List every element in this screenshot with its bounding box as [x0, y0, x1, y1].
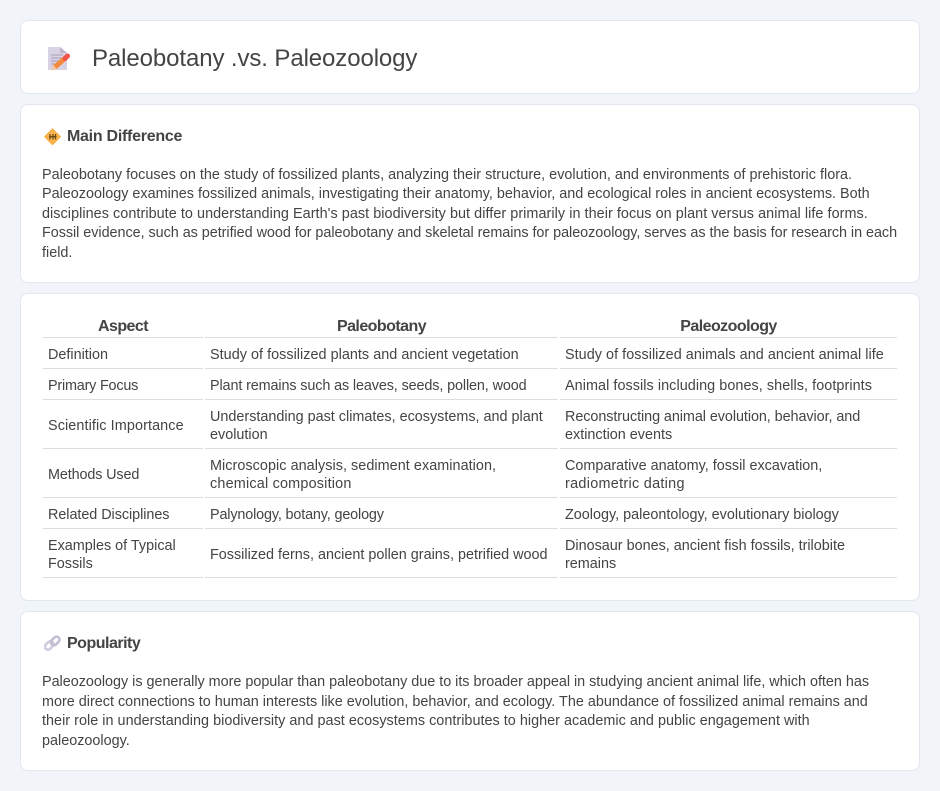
row: methods used: Methods Used: [48, 467, 139, 483]
table header: Aspect: [98, 318, 148, 335]
icon: diamond sign: [44, 128, 61, 146]
panel: comparison table: [20, 293, 920, 601]
row: primary focus: Primary Focus: [48, 378, 138, 394]
icon: chain link: [44, 635, 61, 651]
row: definition: Study of fossilized animals and ancient animal life: [565, 347, 884, 363]
panel: popularity: [20, 611, 920, 771]
row: scientific importance: Understanding past climates, ecosystems, and plant: [210, 409, 543, 425]
text block: main difference: disciplines contribute to understanding Earth's past biodiversity but differ primarily in their focus on plant versus animal life forms.: [42, 206, 868, 222]
row: examples of typical fossils: Dinosaur bones, ancient fish fossils, trilobite: [565, 538, 845, 554]
row: methods used: Microscopic analysis, sediment examination,: [210, 458, 496, 474]
row: examples of typical fossils: [43, 538, 897, 578]
text block: main difference: Fossil evidence, such as petrified wood for paleobotany and skeletal remains for paleozoology, serves as the basis for research in each: [42, 225, 897, 241]
text block: popularity: Paleozoology is generally more popular than paleobotany due to its broader appeal in studying ancient animal life, which often has: [42, 674, 869, 690]
text block: main difference: Paleozoology examines fossilized animals, investigating their anatomy, behavior, and ecological roles in ancient ecosystems. Both: [42, 186, 870, 202]
row: definition: Definition: [48, 347, 108, 363]
title: Paleobotany .vs. Paleozoology: [92, 45, 417, 72]
row: primary focus: [43, 378, 897, 400]
text block: main difference: Paleobotany focuses on the study of fossilized plants, analyzing their structure, evolution, and environments of prehistoric flora.: [42, 167, 852, 183]
header panel: [20, 20, 920, 94]
row: examples of typical fossils: Fossils: [48, 556, 93, 572]
row: definition: Study of fossilized plants and ancient vegetation: [210, 347, 519, 363]
row: scientific importance: [43, 409, 897, 449]
table header: Paleobotany: [337, 318, 426, 335]
text block: popularity: [42, 674, 869, 749]
row: methods used: [43, 458, 897, 498]
row: methods used: Comparative anatomy, fossil excavation,: [565, 458, 822, 474]
row: related disciplines: Related Disciplines: [48, 507, 169, 523]
text block: popularity: paleozoology.: [42, 733, 130, 749]
text block: main difference: [42, 167, 897, 261]
row: methods used: chemical composition: [210, 476, 352, 492]
row: methods used: radiometric dating: [565, 476, 685, 492]
row: definition: [43, 347, 897, 369]
row: scientific importance: extinction events: [565, 427, 672, 443]
text block: main difference: field.: [42, 245, 72, 261]
row: examples of typical fossils: Examples of Typical: [48, 538, 176, 554]
row: related disciplines: [43, 507, 897, 529]
text block: popularity: more direct connections to human interests like evolution, behavior, and ecology. The abundance of fossilized animal remains and: [42, 694, 868, 710]
row: scientific importance: Scientific Importance: [48, 418, 184, 434]
row: related disciplines: Zoology, paleontology, evolutionary biology: [565, 507, 839, 523]
heading: main difference: Main Difference: [67, 128, 182, 145]
table header: Paleozoology: [680, 318, 777, 335]
text block: popularity: their role in understanding biodiversity and past ecosystems contributes to higher academic and public engagement with: [42, 713, 810, 729]
row: primary focus: Animal fossils including bones, shells, footprints: [565, 378, 872, 394]
heading: popularity: Popularity: [67, 635, 140, 652]
row: examples of typical fossils: remains: [565, 556, 616, 572]
panel: main difference: [20, 104, 920, 283]
row: related disciplines: Palynology, botany, geology: [210, 507, 384, 523]
row: primary focus: Plant remains such as leaves, seeds, pollen, wood: [210, 378, 526, 394]
icon: document with pencil: [48, 47, 70, 70]
row: scientific importance: evolution: [210, 427, 268, 443]
table header: [43, 318, 897, 338]
row: examples of typical fossils: Fossilized ferns, ancient pollen grains, petrified wood: [210, 547, 548, 563]
row: scientific importance: Reconstructing animal evolution, behavior, and: [565, 409, 860, 425]
